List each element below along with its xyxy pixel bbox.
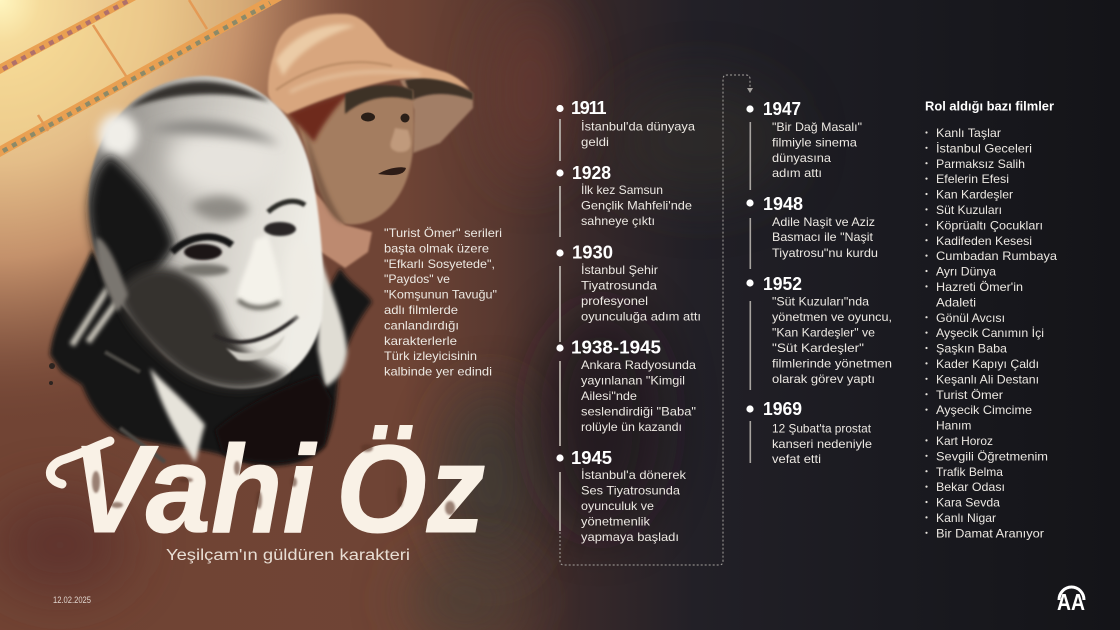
entry 1928 — [556, 163, 692, 237]
shirt — [50, 250, 372, 466]
film list: Ayşecik Cimcime — [936, 403, 1032, 417]
film list: Süt Kuzuları — [936, 203, 1002, 217]
title: Öz — [336, 421, 485, 559]
cheek — [287, 240, 313, 320]
film list: Kan Kardeşler — [936, 188, 1013, 202]
film list: Köprüaltı Çocukları — [936, 218, 1043, 232]
intro text block: Türk izleyicisinin — [384, 349, 477, 363]
entry 1945 — [556, 448, 687, 544]
film strip — [0, 0, 282, 157]
entry 1945: yönetmenlik — [581, 514, 651, 528]
white collar left — [150, 368, 205, 462]
film list: Ayşecik Canımın İçi — [936, 326, 1044, 340]
film list: Kart Horoz — [936, 434, 993, 448]
film list: Cumbadan Rumbaya — [936, 249, 1057, 263]
intro text block: başta olmak üzere — [384, 241, 489, 255]
entry 1945: 1945 — [571, 448, 612, 468]
entry 1938-1945: seslendirdiği "Baba" — [581, 404, 696, 418]
film list: Parmaksız Salih — [936, 157, 1025, 171]
right collar highlight — [318, 250, 347, 387]
entry 1948: 1948 — [763, 194, 803, 214]
film list: Efelerin Efesi — [936, 172, 1009, 186]
hat underside — [400, 74, 473, 153]
eyes and mouth — [361, 112, 375, 122]
film list: Şaşkın Baba — [936, 342, 1007, 356]
lower shirt texture — [215, 375, 332, 462]
film list — [925, 126, 1057, 540]
date: 12.02.2025 — [53, 595, 91, 605]
entry 1952 — [746, 274, 892, 390]
film list: Adaleti — [936, 295, 976, 309]
entry 1952: 1952 — [763, 274, 802, 294]
entry 1938-1945 — [556, 338, 696, 446]
entry 1945: yapmaya başladı — [581, 530, 679, 544]
neck and shirt — [308, 185, 372, 268]
film list: Kanlı Taşlar — [936, 126, 1001, 140]
entry 1911: İstanbul'da dünyaya — [581, 120, 695, 134]
entry 1952: "Süt Kuzuları"nda — [772, 294, 869, 308]
film list: Hanım — [936, 419, 971, 433]
entry 1945: oyunculuk ve — [581, 499, 654, 513]
nose — [238, 235, 282, 309]
entry 1928: sahneye çıktı — [581, 214, 655, 228]
film list heading: Rol aldığı bazı filmler — [925, 100, 1054, 114]
photo: man in straw hat — [268, 14, 473, 268]
entry 1947: "Bir Dağ Masalı" — [772, 120, 862, 134]
entry 1969: kanseri nedeniyle — [772, 437, 872, 451]
eyebrows — [172, 237, 232, 252]
logo: AA: AA — [1057, 589, 1085, 615]
entry 1938-1945: Ailesi"nde — [581, 389, 637, 403]
eyes — [184, 244, 222, 260]
entry 1969: 1969 — [763, 399, 802, 419]
title: Vahi — [72, 421, 317, 559]
film list: Bir Damat Aranıyor — [936, 526, 1044, 540]
entry 1947: filmiyle sinema — [772, 136, 857, 150]
entry 1928: İlk kez Samsun — [581, 183, 663, 197]
intro text block: "Efkarlı Sosyetede", — [384, 257, 495, 271]
subtitle: Yeşilçam'ın güldüren karakteri — [166, 547, 410, 564]
film list: Kader Kapıyı Çaldı — [936, 357, 1039, 371]
entry 1969: 12 Şubat'ta prostat — [772, 422, 872, 436]
entry 1930: profesyonel — [581, 294, 648, 308]
entry 1948: Adile Naşit ve Aziz — [772, 215, 875, 229]
title — [50, 421, 485, 559]
intro text block: karakterlerle — [384, 334, 457, 348]
intro text block — [384, 226, 502, 379]
entry 1947 — [746, 99, 862, 190]
entry 1969 — [746, 399, 872, 466]
hat crown — [268, 14, 470, 114]
entry 1947: dünyasına — [772, 151, 831, 165]
intro text block: kalbinde yer edindi — [384, 365, 492, 379]
entry 1930: 1930 — [572, 242, 613, 262]
entry 1911: geldi — [581, 135, 609, 149]
face — [298, 89, 414, 224]
entry 1930: oyunculuğa adım attı — [581, 310, 701, 324]
entry 1911 — [556, 98, 695, 161]
film list: Ayrı Dünya — [936, 265, 996, 279]
intro text block: "Paydos" ve — [384, 272, 450, 286]
film list: Sevgili Öğretmenim — [936, 449, 1048, 463]
entry 1928: Gençlik Mahfeli'nde — [581, 198, 692, 212]
entry 1938-1945: rolüyle ün kazandı — [581, 420, 682, 434]
intro text block: canlandırdığı — [384, 318, 459, 332]
entry 1948: Basmacı ile "Naşit — [772, 230, 874, 244]
film list: Trafik Belma — [936, 465, 1003, 479]
entry 1952: "Kan Kardeşler" ve — [772, 326, 875, 340]
entry 1947: 1947 — [763, 99, 801, 119]
film list: İstanbul Geceleri — [936, 141, 1032, 155]
entry 1928: 1928 — [572, 163, 611, 183]
entry 1952: yönetmen ve oyuncu, — [772, 310, 892, 324]
timeline connector dashed arrow — [560, 75, 753, 565]
entry 1938-1945: 1938-1945 — [571, 338, 661, 358]
entry 1930 — [556, 242, 701, 342]
smile — [214, 316, 298, 342]
film list: Kara Sevda — [936, 496, 1000, 510]
timeline column 1 — [556, 98, 701, 544]
forehead highlights — [98, 113, 138, 157]
film list: Kanlı Nigar — [936, 511, 996, 525]
entry 1952: "Süt Kardeşler" — [772, 341, 864, 355]
entry 1948: Tiyatrosu"nu kurdu — [772, 246, 878, 260]
intro text block: "Komşunun Tavuğu" — [384, 288, 497, 302]
entry 1952: filmlerinde yönetmen — [772, 356, 892, 370]
entry 1952: olarak görev yaptı — [772, 372, 875, 386]
film list: Gönül Avcısı — [936, 311, 1005, 325]
intro text block: adlı filmlerde — [384, 303, 458, 317]
film list: Turist Ömer — [936, 388, 1003, 402]
timeline column 2 — [746, 99, 892, 466]
hair and shadows — [89, 155, 175, 298]
entry 1969: vefat etti — [772, 452, 821, 466]
entry 1945: İstanbul'a dönerek — [581, 468, 687, 482]
V swash — [50, 441, 110, 484]
ear — [96, 238, 128, 312]
film list: Hazreti Ömer'in — [936, 280, 1023, 294]
entry 1938-1945: yayınlanan "Kimgil — [581, 374, 685, 388]
head — [89, 76, 323, 388]
intro text block: "Turist Ömer" serileri — [384, 226, 502, 240]
entry 1930: Tiyatrosunda — [581, 278, 657, 292]
film list: Bekar Odası — [936, 480, 1005, 494]
entry 1911: 1911 — [571, 98, 606, 118]
entry 1945: Ses Tiyatrosunda — [581, 484, 680, 498]
photo: Vahi Öz portrait — [49, 76, 372, 466]
title texture — [92, 444, 455, 515]
entry 1938-1945: Ankara Radyosunda — [581, 358, 696, 372]
film list: Kadifeden Kesesi — [936, 234, 1032, 248]
film list: Keşanlı Ali Destanı — [936, 372, 1039, 386]
entry 1930: İstanbul Şehir — [581, 263, 658, 277]
entry 1947: adım attı — [772, 166, 822, 180]
entry 1948 — [746, 194, 878, 269]
